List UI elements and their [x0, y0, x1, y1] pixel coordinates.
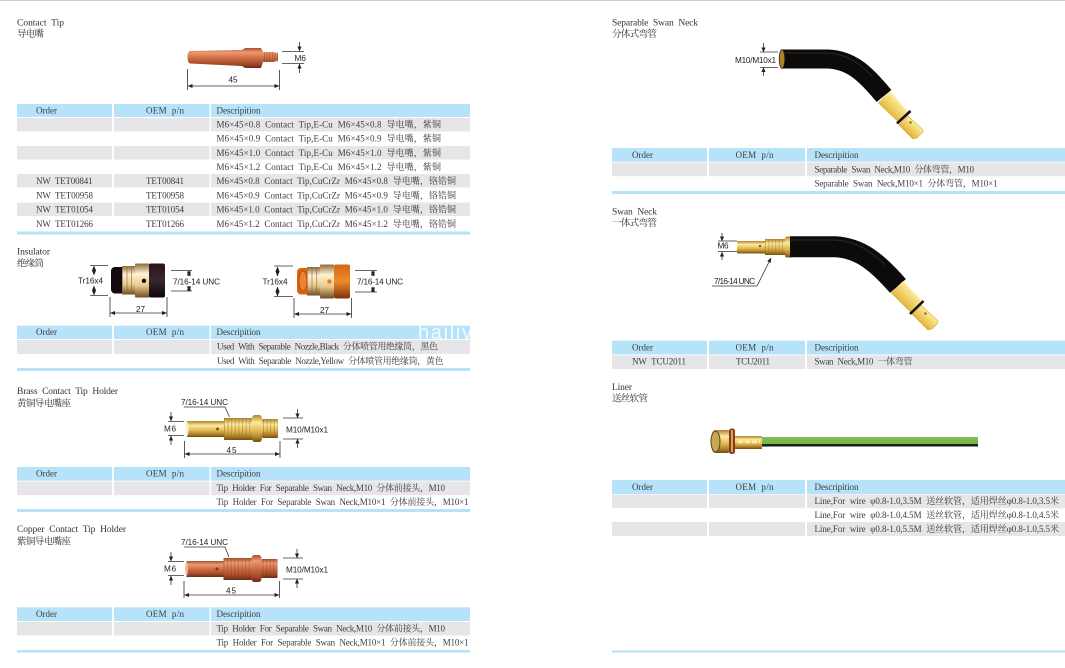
table: contact tip: M6×45×0.8 Contact Tip,E-Cu M6×45×0.8 导电嘴，紫铜	[216, 118, 441, 130]
table: contact tip: M6×45×1.0 Contact Tip,E-Cu M6×45×1.0 导电嘴，紫铜	[216, 147, 441, 159]
table: insulator: Used With Separable Nozzle,Yellow 分体喷管用绝缘筒，黄色	[217, 355, 444, 367]
table: separable swan neck: Separable Swan Neck,M10×1 分体弯管，M10×1	[814, 178, 998, 190]
heading: copper contact tip holder	[17, 525, 127, 548]
panel: separable swan neck	[612, 18, 1065, 194]
heading: copper contact tip holder: 紫铜导电嘴座	[17, 536, 71, 548]
heading: insulator: Insulator	[17, 248, 51, 258]
table: copper holder: Descripition	[216, 609, 261, 619]
table: copper holder: Tip Holder For Separable Swan Neck,M10 分体前接头，M10	[216, 623, 446, 635]
table: copper holder: Tip Holder For Separable Swan Neck,M10×1 分体前接头，M10×1	[216, 637, 468, 649]
diagram: separable swan neck	[735, 43, 923, 139]
table: contact tip: M6×45×1.2 Contact Tip,E-Cu M6×45×1.2 导电嘴，紫铜	[216, 161, 441, 173]
table: separable swan neck: Separable Swan Neck,M10 分体弯管，M10	[814, 164, 974, 176]
table: separable swan neck	[612, 148, 1065, 194]
table: copper holder	[17, 607, 470, 652]
table: brass holder: Descripition	[216, 468, 261, 478]
diagram: copper holder: M6	[164, 564, 176, 574]
diagram: copper holder	[164, 538, 328, 598]
heading: separable swan neck: 分体式弯管	[612, 28, 657, 40]
table: brass holder	[17, 467, 470, 512]
diagram: swan neck: M6	[718, 242, 729, 250]
diagram: brass holder: 7/16-14 UNC	[181, 398, 228, 407]
diagram: copper holder: M10/M10x1	[286, 566, 328, 574]
diagram: contact tip: M6	[294, 54, 306, 63]
heading: contact tip	[17, 18, 64, 40]
table: contact tip: Descripition	[216, 106, 261, 116]
panel: copper contact tip holder	[17, 525, 470, 652]
table: swan neck	[612, 341, 1065, 369]
table: swan neck: OEM p/n	[736, 342, 774, 352]
heading: swan neck: 一体式弯管	[612, 217, 657, 229]
table: swan neck: Descripition	[814, 342, 859, 352]
diagram: brass holder: 45	[226, 446, 237, 455]
table: contact tip: TET00841	[146, 176, 184, 186]
diagram: black insulator	[78, 264, 220, 317]
table: swan neck: TCU2011	[736, 356, 770, 366]
diagram: yellow insulator	[262, 264, 403, 318]
table: insulator: Order	[36, 327, 57, 337]
table: separable swan neck: Descripition	[814, 150, 859, 160]
table: contact tip: NW TET00841	[36, 176, 92, 186]
table: brass holder: Tip Holder For Separable Swan Neck,M10×1 分体前接头，M10×1	[216, 496, 468, 508]
diagram: swan neck: 7/16-14 UNC	[714, 277, 755, 286]
diagram: copper holder: 45	[226, 586, 236, 596]
table: liner: OEM p/n	[736, 482, 774, 492]
diagram: brass holder	[164, 398, 328, 458]
diagram: yellow insulator: 7/16-14 UNC	[357, 278, 403, 286]
heading: liner	[612, 383, 648, 404]
table: contact tip: NW TET01266	[36, 219, 94, 229]
table: contact tip: M6×45×0.8 Contact Tip,CuCrZr M6×45×0.8 导电嘴，铬锆铜	[216, 175, 456, 187]
table: insulator: OEM p/n	[146, 327, 184, 337]
table: insulator	[17, 326, 470, 371]
panel: swan neck	[612, 208, 1065, 369]
diagram: separable swan neck: M10/M10x1	[735, 56, 776, 65]
heading: brass contact tip holder: 黄铜导电嘴座	[17, 398, 71, 410]
table: insulator: Descripition	[216, 327, 261, 337]
heading: contact tip: 导电嘴	[17, 28, 44, 40]
heading: separable swan neck	[612, 18, 698, 40]
heading: liner: 送丝软管	[612, 392, 648, 404]
heading: contact tip: Contact Tip	[17, 18, 64, 28]
table: contact tip: M6×45×0.9 Contact Tip,E-Cu M6×45×0.9 导电嘴，紫铜	[216, 133, 441, 145]
table: contact tip: NW TET00958	[36, 190, 94, 200]
diagram: liner	[711, 428, 978, 454]
heading: brass contact tip holder	[17, 387, 119, 410]
table: brass holder: Order	[36, 468, 57, 478]
table: liner	[612, 480, 1065, 536]
panel: liner	[612, 383, 1065, 652]
table: swan neck: Order	[632, 342, 653, 352]
table: contact tip: Order	[36, 106, 57, 116]
table: contact tip: OEM p/n	[146, 106, 184, 116]
table: brass holder: OEM p/n	[146, 468, 184, 478]
table: contact tip: TET01054	[146, 205, 184, 215]
diagram: black insulator: Tr16x4	[78, 276, 103, 286]
diagram: black insulator: 27	[136, 305, 145, 314]
diagram: contact tip	[188, 42, 306, 90]
table: insulator: Used With Separable Nozzle,Black 分体喷管用绝缘筒，黑色	[217, 340, 438, 352]
heading: separable swan neck: Separable Swan Neck	[612, 18, 698, 28]
diagram: copper holder: 7/16-14 UNC	[181, 538, 228, 547]
table: contact tip: M6×45×1.0 Contact Tip,CuCrZr M6×45×1.0 导电嘴，铬锆铜	[216, 204, 456, 216]
table: contact tip: NW TET01054	[36, 205, 94, 215]
table: liner: Order	[632, 482, 653, 492]
heading: insulator	[17, 248, 51, 270]
table: liner: Descripition	[814, 482, 859, 492]
table: contact tip	[17, 104, 470, 234]
table: separable swan neck: OEM p/n	[736, 150, 774, 160]
diagram: yellow insulator: 27	[320, 306, 329, 315]
diagram: yellow insulator: Tr16x4	[262, 278, 288, 286]
panel: contact tip	[17, 18, 470, 234]
table: brass holder: Tip Holder For Separable Swan Neck,M10 分体前接头，M10	[216, 482, 446, 494]
panel: insulator	[17, 248, 472, 371]
table: liner: Line,For wire φ0.8-1.0,5.5M 送丝软管，适用焊丝φ0.8-1.0,5.5米	[814, 523, 1059, 535]
table: contact tip: M6×45×0.9 Contact Tip,CuCrZr M6×45×0.9 导电嘴，铬锆铜	[216, 189, 456, 201]
heading: liner: Liner	[612, 383, 633, 393]
diagram: contact tip: 45	[228, 76, 238, 84]
heading: insulator: 绝缘筒	[17, 258, 44, 270]
heading: swan neck: Swan Neck	[612, 208, 657, 218]
watermark: hailiv	[418, 322, 472, 344]
panel: brass contact tip holder	[17, 387, 470, 512]
table: copper holder: Order	[36, 609, 57, 619]
heading: brass contact tip holder: Brass Contact Tip Holder	[17, 387, 119, 397]
heading: swan neck	[612, 208, 657, 229]
table: copper holder: OEM p/n	[146, 609, 184, 619]
heading: copper contact tip holder: Copper Contact Tip Holder	[17, 525, 127, 535]
table: swan neck: Swan Neck,M10 一体弯管	[814, 356, 912, 366]
table: swan neck: NW TCU2011	[632, 356, 686, 366]
diagram: brass holder: M10/M10x1	[286, 426, 328, 434]
table: liner: Line,For wire φ0.8-1.0,3.5M 送丝软管，适用焊丝φ0.8-1.0,3.5米	[814, 495, 1059, 507]
diagram: swan neck	[712, 233, 938, 330]
table: liner: Line,For wire φ0.8-1.0,4.5M 送丝软管，适用焊丝φ0.8-1.0,4.5米	[814, 509, 1059, 521]
diagram: black insulator: 7/16-14 UNC	[173, 278, 220, 286]
table: contact tip: TET00958	[146, 190, 184, 200]
table: contact tip: TET01266	[146, 219, 184, 229]
table: separable swan neck: Order	[632, 150, 653, 160]
table: contact tip: M6×45×1.2 Contact Tip,CuCrZr M6×45×1.2 导电嘴，铬锆铜	[216, 218, 456, 230]
diagram: brass holder: M6	[164, 424, 176, 434]
